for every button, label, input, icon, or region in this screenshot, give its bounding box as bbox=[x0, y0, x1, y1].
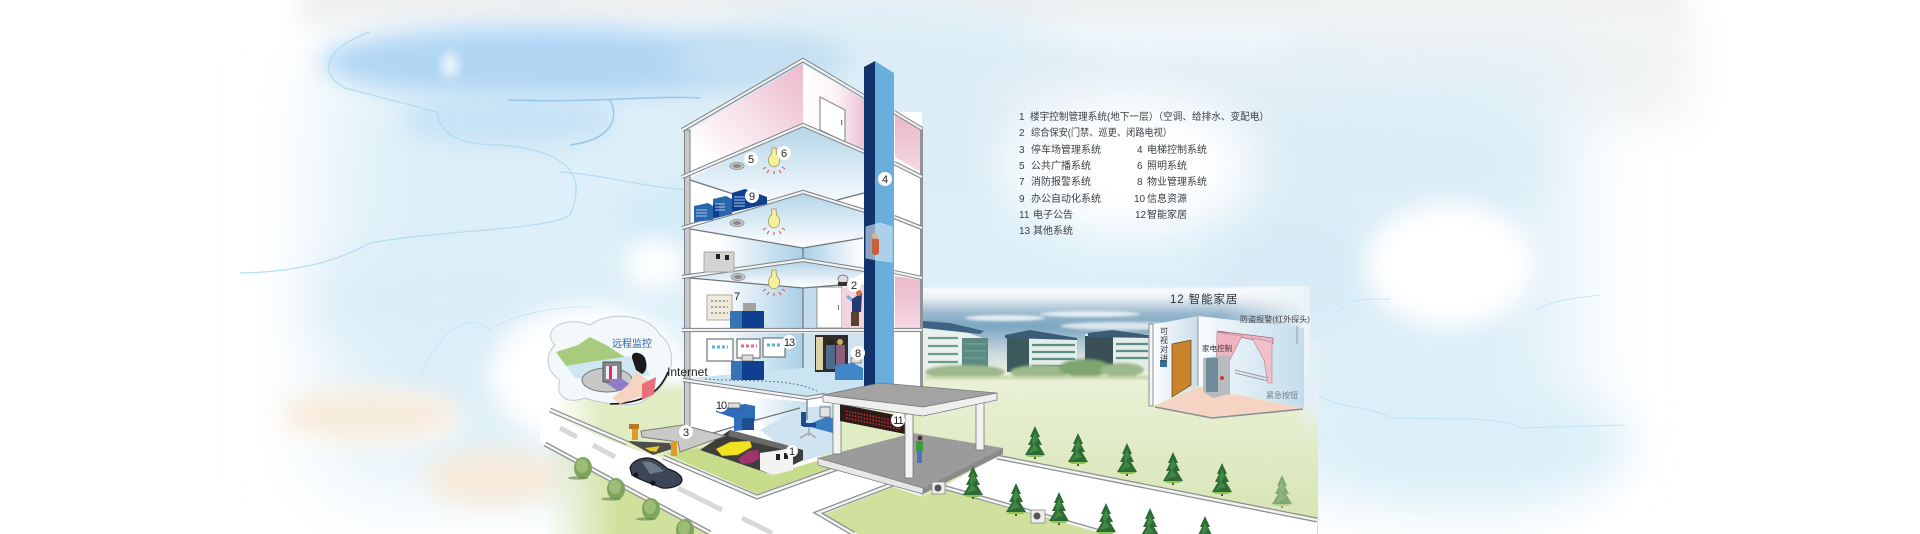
systems legend: 2 bbox=[1019, 128, 1025, 139]
floor slabs bbox=[682, 60, 865, 398]
room labels bbox=[1160, 314, 1310, 400]
home control cabinet bbox=[1203, 355, 1230, 398]
property management doorway bbox=[815, 335, 863, 380]
systems legend: 办公自动化系统 bbox=[1031, 192, 1101, 205]
road and kerbs bbox=[540, 410, 1317, 534]
elevator tower bbox=[864, 61, 894, 389]
distant tree line bbox=[925, 359, 1150, 379]
number badges: 4 bbox=[882, 174, 888, 186]
apartment block A bbox=[923, 321, 988, 377]
room labels: 讲 bbox=[1160, 353, 1168, 363]
parking-level walls bbox=[690, 385, 833, 475]
smart home heading: 12 智能家居 bbox=[1170, 292, 1238, 306]
systems legend: 13 bbox=[1019, 226, 1031, 237]
systems legend: 12 bbox=[1135, 210, 1147, 221]
room labels: 紧急按钮 bbox=[1266, 390, 1298, 400]
systems legend: 公共广播系统 bbox=[1031, 159, 1091, 172]
top floor walls and door bbox=[690, 64, 865, 177]
ground-level office walls and floor bbox=[690, 333, 865, 398]
number badges: 7 bbox=[734, 291, 740, 303]
parking-level desk 10 bbox=[716, 403, 755, 431]
intercom panel bbox=[1160, 360, 1167, 367]
systems legend bbox=[1019, 110, 1269, 237]
systems legend: 6 bbox=[1137, 161, 1143, 172]
building interior base bbox=[690, 130, 865, 405]
second level ceiling and walls bbox=[690, 192, 865, 278]
skyline photo bbox=[921, 286, 1310, 379]
left column bbox=[684, 130, 690, 426]
building bbox=[627, 60, 923, 475]
systems legend: 照明系统 bbox=[1147, 159, 1187, 172]
Internet label: Internet bbox=[667, 365, 708, 379]
systems legend: 8 bbox=[1137, 177, 1143, 188]
apartment block B bbox=[1005, 330, 1077, 372]
systems legend: 7 bbox=[1019, 177, 1025, 188]
number badges: 8 bbox=[855, 348, 861, 360]
systems legend: 3 bbox=[1019, 145, 1025, 156]
speakers bbox=[730, 162, 745, 281]
standing person bbox=[916, 436, 923, 463]
room labels: 可 bbox=[1160, 327, 1168, 336]
systems legend: 11 bbox=[1019, 210, 1030, 221]
systems legend: 电梯控制系统 bbox=[1147, 143, 1207, 156]
server racks bbox=[694, 189, 767, 222]
car on road bbox=[630, 458, 682, 488]
systems legend: 综合保安(门禁、巡更、闭路电视） bbox=[1031, 126, 1172, 139]
lawn in front of canopy bbox=[818, 484, 1105, 534]
woman on the phone bbox=[612, 353, 656, 404]
number badges: 6 bbox=[781, 148, 787, 160]
systems legend: 9 bbox=[1019, 194, 1025, 205]
systems legend: 信息资源 bbox=[1147, 192, 1187, 205]
roadside bushes bbox=[568, 457, 694, 534]
room labels: 视 bbox=[1160, 335, 1168, 345]
systems legend: 停车场管理系统 bbox=[1031, 143, 1101, 156]
room labels: 家电控制 bbox=[1202, 343, 1232, 353]
systems legend: 4 bbox=[1137, 145, 1143, 156]
first level walls and door bbox=[690, 261, 865, 328]
remote monitoring label: 远程监控 bbox=[612, 337, 652, 350]
room labels: 防盗报警(红外探头) bbox=[1240, 314, 1310, 324]
number badges: 1 bbox=[789, 446, 795, 458]
third level ceiling bbox=[690, 124, 865, 213]
systems legend: 其他系统 bbox=[1033, 224, 1073, 237]
window curtains bbox=[1216, 331, 1273, 383]
systems legend: 物业管理系统 bbox=[1147, 175, 1207, 188]
light bulbs bbox=[763, 148, 785, 296]
room labels: 对 bbox=[1160, 344, 1168, 354]
entry barrier and ramp bbox=[627, 424, 725, 456]
ground: green lawn bbox=[555, 340, 1319, 534]
systems legend: 10 bbox=[1134, 194, 1146, 205]
door bbox=[1172, 340, 1191, 397]
grey cabinets bbox=[704, 252, 734, 272]
lawn by parking bbox=[663, 445, 838, 497]
number badges: 2 bbox=[851, 280, 857, 292]
number badges: 13 bbox=[784, 337, 795, 349]
smart home room bbox=[1149, 314, 1310, 418]
number badges: 3 bbox=[683, 427, 689, 439]
parking garage with cars bbox=[700, 430, 803, 475]
number badges: 10 bbox=[716, 400, 727, 412]
glass elevator car bbox=[866, 223, 892, 262]
canopy with LED board bbox=[818, 383, 1003, 494]
parking-level desk and chair bbox=[800, 407, 833, 438]
trees bbox=[963, 426, 1292, 534]
number badges: 9 bbox=[749, 191, 755, 203]
remote monitoring cloud bbox=[548, 316, 672, 405]
air conditioning units bbox=[932, 482, 1045, 523]
systems legend: 5 bbox=[1019, 161, 1025, 172]
systems legend: 电子公告 bbox=[1033, 208, 1073, 221]
systems legend: 智能家居 bbox=[1147, 208, 1187, 221]
number badges bbox=[679, 146, 905, 458]
desk and laptop bbox=[582, 362, 632, 392]
apartment block C bbox=[1085, 330, 1149, 368]
security camera and guard bbox=[838, 275, 862, 326]
fire alarm panel and box bbox=[707, 295, 764, 328]
office wall boards bbox=[707, 338, 785, 361]
systems legend: 消防报警系统 bbox=[1031, 175, 1091, 188]
systems legend: 1 bbox=[1019, 112, 1025, 123]
number badges: 11 bbox=[893, 415, 904, 427]
systems legend: 楼宇控制管理系统(地下一层）（空调、给排水、变配电） bbox=[1030, 110, 1269, 123]
office desk and printer bbox=[731, 355, 764, 380]
number badges: 5 bbox=[748, 154, 754, 166]
right wing bbox=[894, 112, 923, 388]
